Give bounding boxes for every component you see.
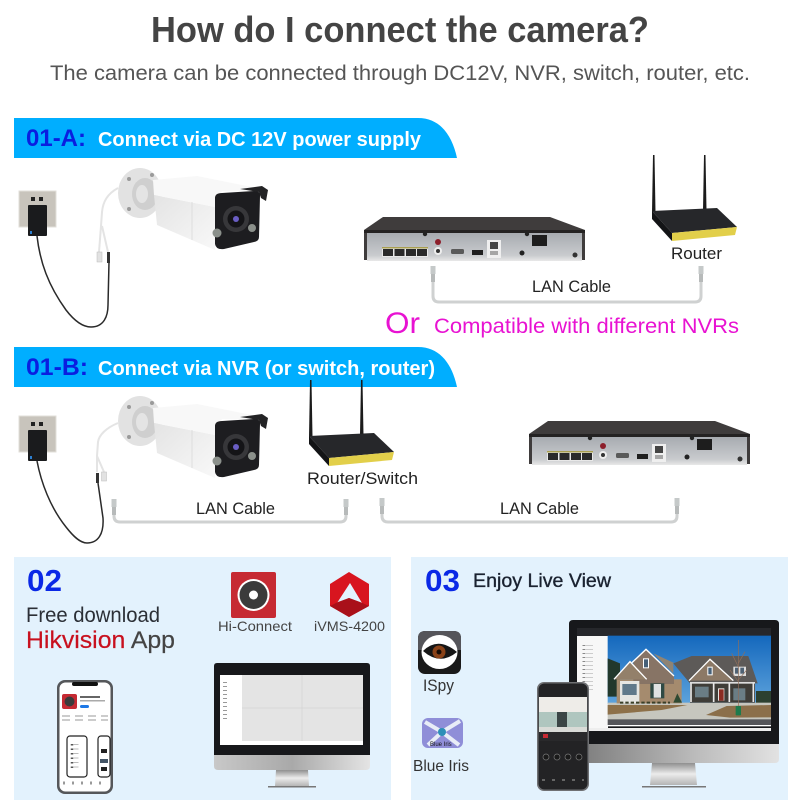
icon: Blue Iris <box>422 718 463 748</box>
camera image: house <box>608 636 771 726</box>
icon: NVR B <box>529 421 750 465</box>
icon: bullet camera B <box>118 396 268 478</box>
callout: compatible NVRs: Compatible with different NVRs <box>434 315 739 338</box>
label: iSpy: ISpy <box>423 676 454 695</box>
label: Router/Switch: Router/Switch <box>307 470 418 488</box>
label: LAN Cable B right: LAN Cable <box>500 500 579 518</box>
heading: Hikvision App: Hikvision App <box>26 627 175 654</box>
power cable B <box>37 423 118 543</box>
taskbar <box>577 728 771 731</box>
icon: iVMS-4200 <box>330 572 369 617</box>
monitor: iVMS client <box>214 663 370 788</box>
phone: App Store page <box>57 680 113 794</box>
icon: Blue Iris: Blue Iris <box>430 742 452 748</box>
step number 03: 03 <box>425 563 460 598</box>
LAN cable A <box>430 266 704 302</box>
banner 01-A <box>14 118 457 158</box>
label: Hi-Connect: Hi-Connect <box>218 618 292 634</box>
icon: router/switch B <box>309 380 394 466</box>
icon: NVR A <box>364 217 585 261</box>
heading: Enjoy Live View: Enjoy Live View <box>473 570 612 592</box>
label: Blue Iris: Blue Iris <box>413 758 469 775</box>
phone: mobile live view <box>537 682 589 791</box>
icon: wall socket with power adapter B <box>19 416 56 461</box>
LAN cable B left <box>112 499 348 522</box>
banner 01-A: Connect via DC 12V power supply <box>98 129 422 151</box>
heading: free download: Free download <box>26 604 160 627</box>
label: LAN Cable B left: LAN Cable <box>196 500 275 518</box>
callout: Or: Or <box>385 307 420 340</box>
monitor: live view <box>569 620 779 788</box>
label: iVMS-4200: iVMS-4200 <box>314 618 385 634</box>
title: How do I connect the camera? <box>151 9 649 50</box>
power cable A <box>37 188 118 327</box>
banner 01-A: 01-A: <box>26 125 86 152</box>
banner 01-B <box>14 347 457 387</box>
icon: wall socket with power adapter A <box>19 191 56 236</box>
icon: router A <box>652 155 737 241</box>
step number 02: 02 <box>27 563 62 598</box>
panel: 02 free download <box>14 557 391 800</box>
banner 01-B: 01-B: <box>26 354 88 381</box>
label: LAN Cable A: LAN Cable <box>532 278 611 296</box>
icon: iSpy <box>418 631 461 674</box>
icon: bullet camera A <box>118 168 268 250</box>
icon: Hi-Connect <box>231 572 276 618</box>
LAN cable B right <box>380 498 680 522</box>
app sidebar <box>577 636 608 728</box>
panel: 03 enjoy live view <box>411 557 788 800</box>
label: Router: Router <box>671 245 723 263</box>
banner 01-B: Connect via NVR (or switch, router) <box>98 358 435 380</box>
subtitle: The camera can be connected through DC12V, NVR, switch, router, etc. <box>50 62 750 85</box>
